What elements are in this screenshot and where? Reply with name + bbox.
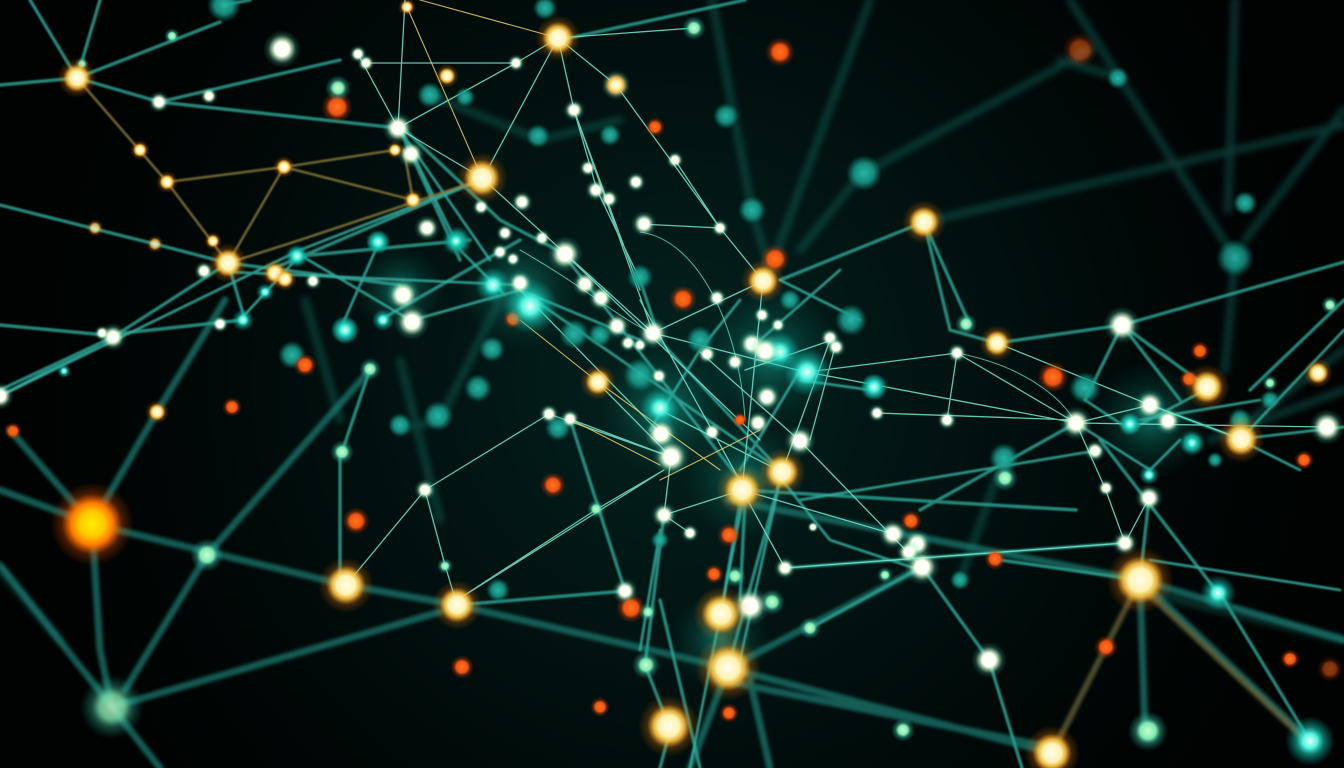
large orange hub node bbox=[50, 482, 134, 566]
foreground thick edges bbox=[0, 300, 1344, 768]
central teal haze bbox=[355, 230, 1210, 690]
thin bright edges bbox=[346, 0, 1327, 605]
out-of-focus teal particles bbox=[207, 0, 1280, 602]
